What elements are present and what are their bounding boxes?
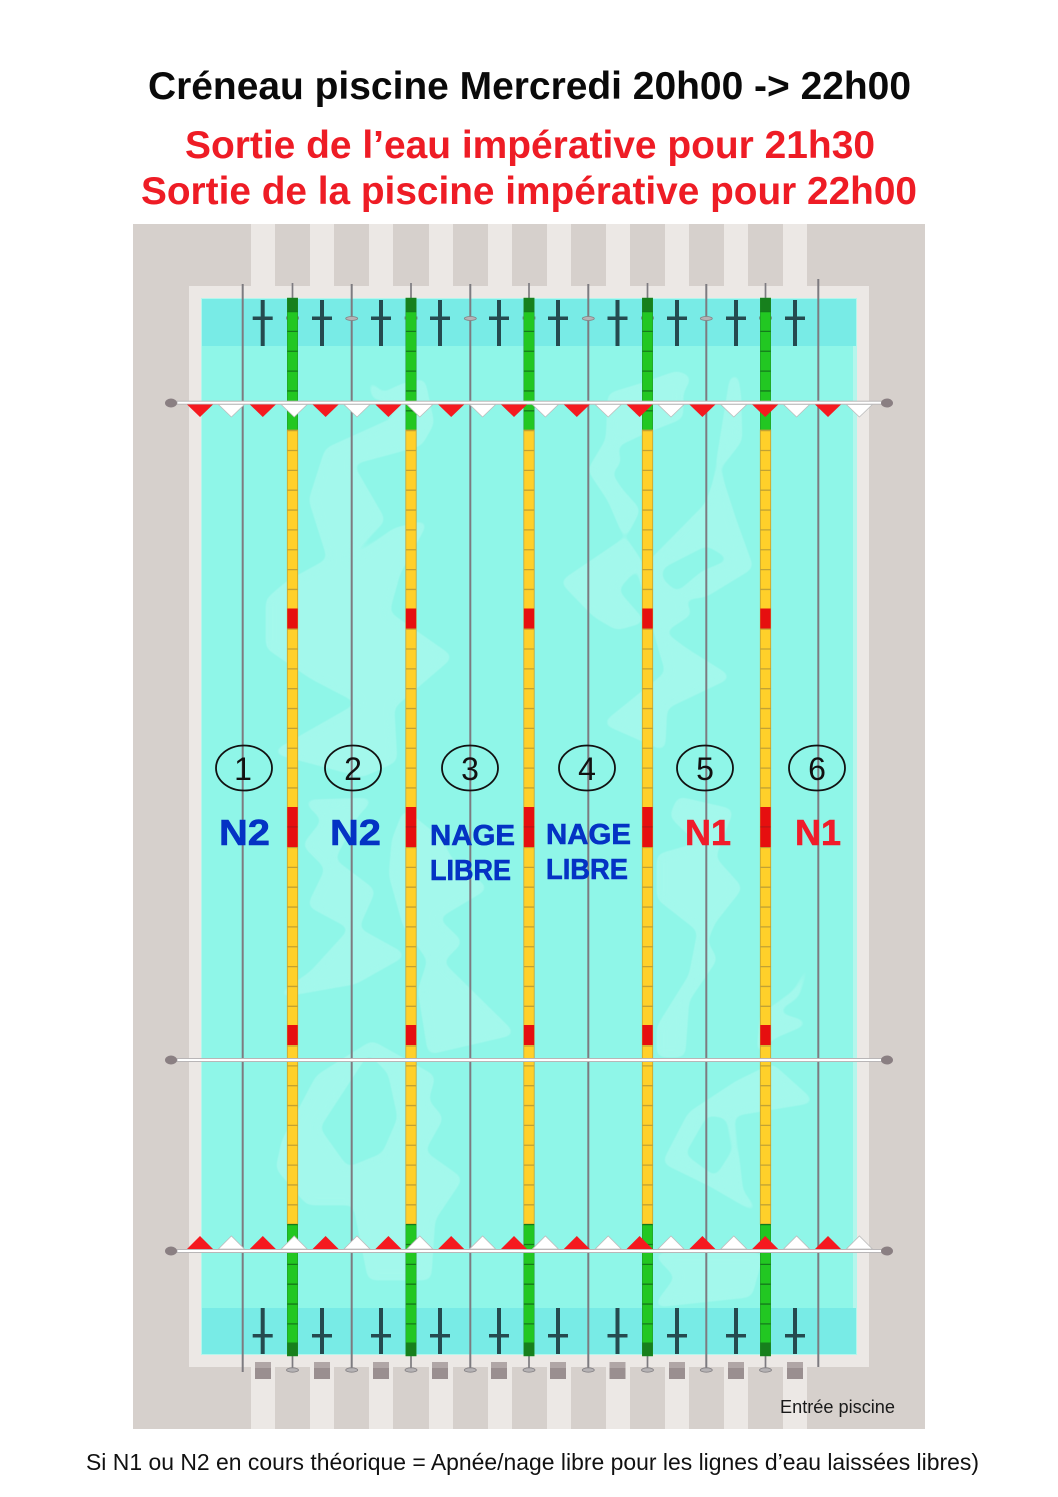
lane 6 label: N1 [795, 812, 841, 853]
lane 4 label [546, 746, 631, 886]
backstroke flags: top rope [165, 398, 893, 417]
panel: pool deck [133, 224, 925, 1429]
lane 5 label [677, 746, 733, 853]
shallow band: bottom [202, 1308, 856, 1354]
lane markers: bottom crosses [253, 1308, 805, 1354]
lane ropes (buoy lines) [286, 283, 772, 1372]
lane 5 label: 5 [696, 751, 714, 787]
shallow band: top [202, 299, 856, 346]
lane 3 label: LIBRE [430, 855, 511, 887]
water reflections [268, 373, 811, 1305]
lane 6 label [789, 746, 845, 853]
starting blocks: bottom [255, 1362, 803, 1379]
lane 1 label [216, 746, 272, 853]
warning: sortie de la piscine: Sortie de la piscine impérative pour 22h00 [141, 170, 917, 213]
pool entrance label: Entrée piscine [780, 1397, 895, 1417]
lane 3 label [430, 746, 515, 887]
lane 1 label: 1 [234, 751, 252, 787]
lane 6 label: 6 [808, 751, 826, 787]
lane 2 label: 2 [344, 751, 362, 787]
warning: sortie de l'eau: Sortie de l’eau impérative pour 21h30 [185, 124, 875, 167]
backstroke flags: bottom rope [165, 1236, 893, 1256]
footer note: Si N1 ou N2 en cours théorique = Apnée/nage libre pour les lignes d’eau laissées libres) [86, 1449, 979, 1475]
title: Créneau piscine Mercredi 20h00 -> 22h00 [148, 65, 911, 108]
lane 5 label: N1 [685, 812, 731, 853]
lane 4 label: LIBRE [546, 854, 628, 886]
lane 2 label: N2 [330, 812, 381, 853]
lane 3 label: 3 [461, 751, 479, 787]
lane 4 label: 4 [578, 751, 596, 787]
lane 2 label [325, 746, 381, 853]
panel: water [201, 298, 857, 1355]
middle rope [165, 1056, 893, 1064]
lane 1 label: N2 [219, 812, 270, 853]
lane markers: top crosses [253, 300, 805, 346]
lane 3 label: NAGE [430, 820, 515, 852]
lane 4 label: NAGE [546, 819, 631, 851]
lane centre lines [243, 279, 818, 1372]
